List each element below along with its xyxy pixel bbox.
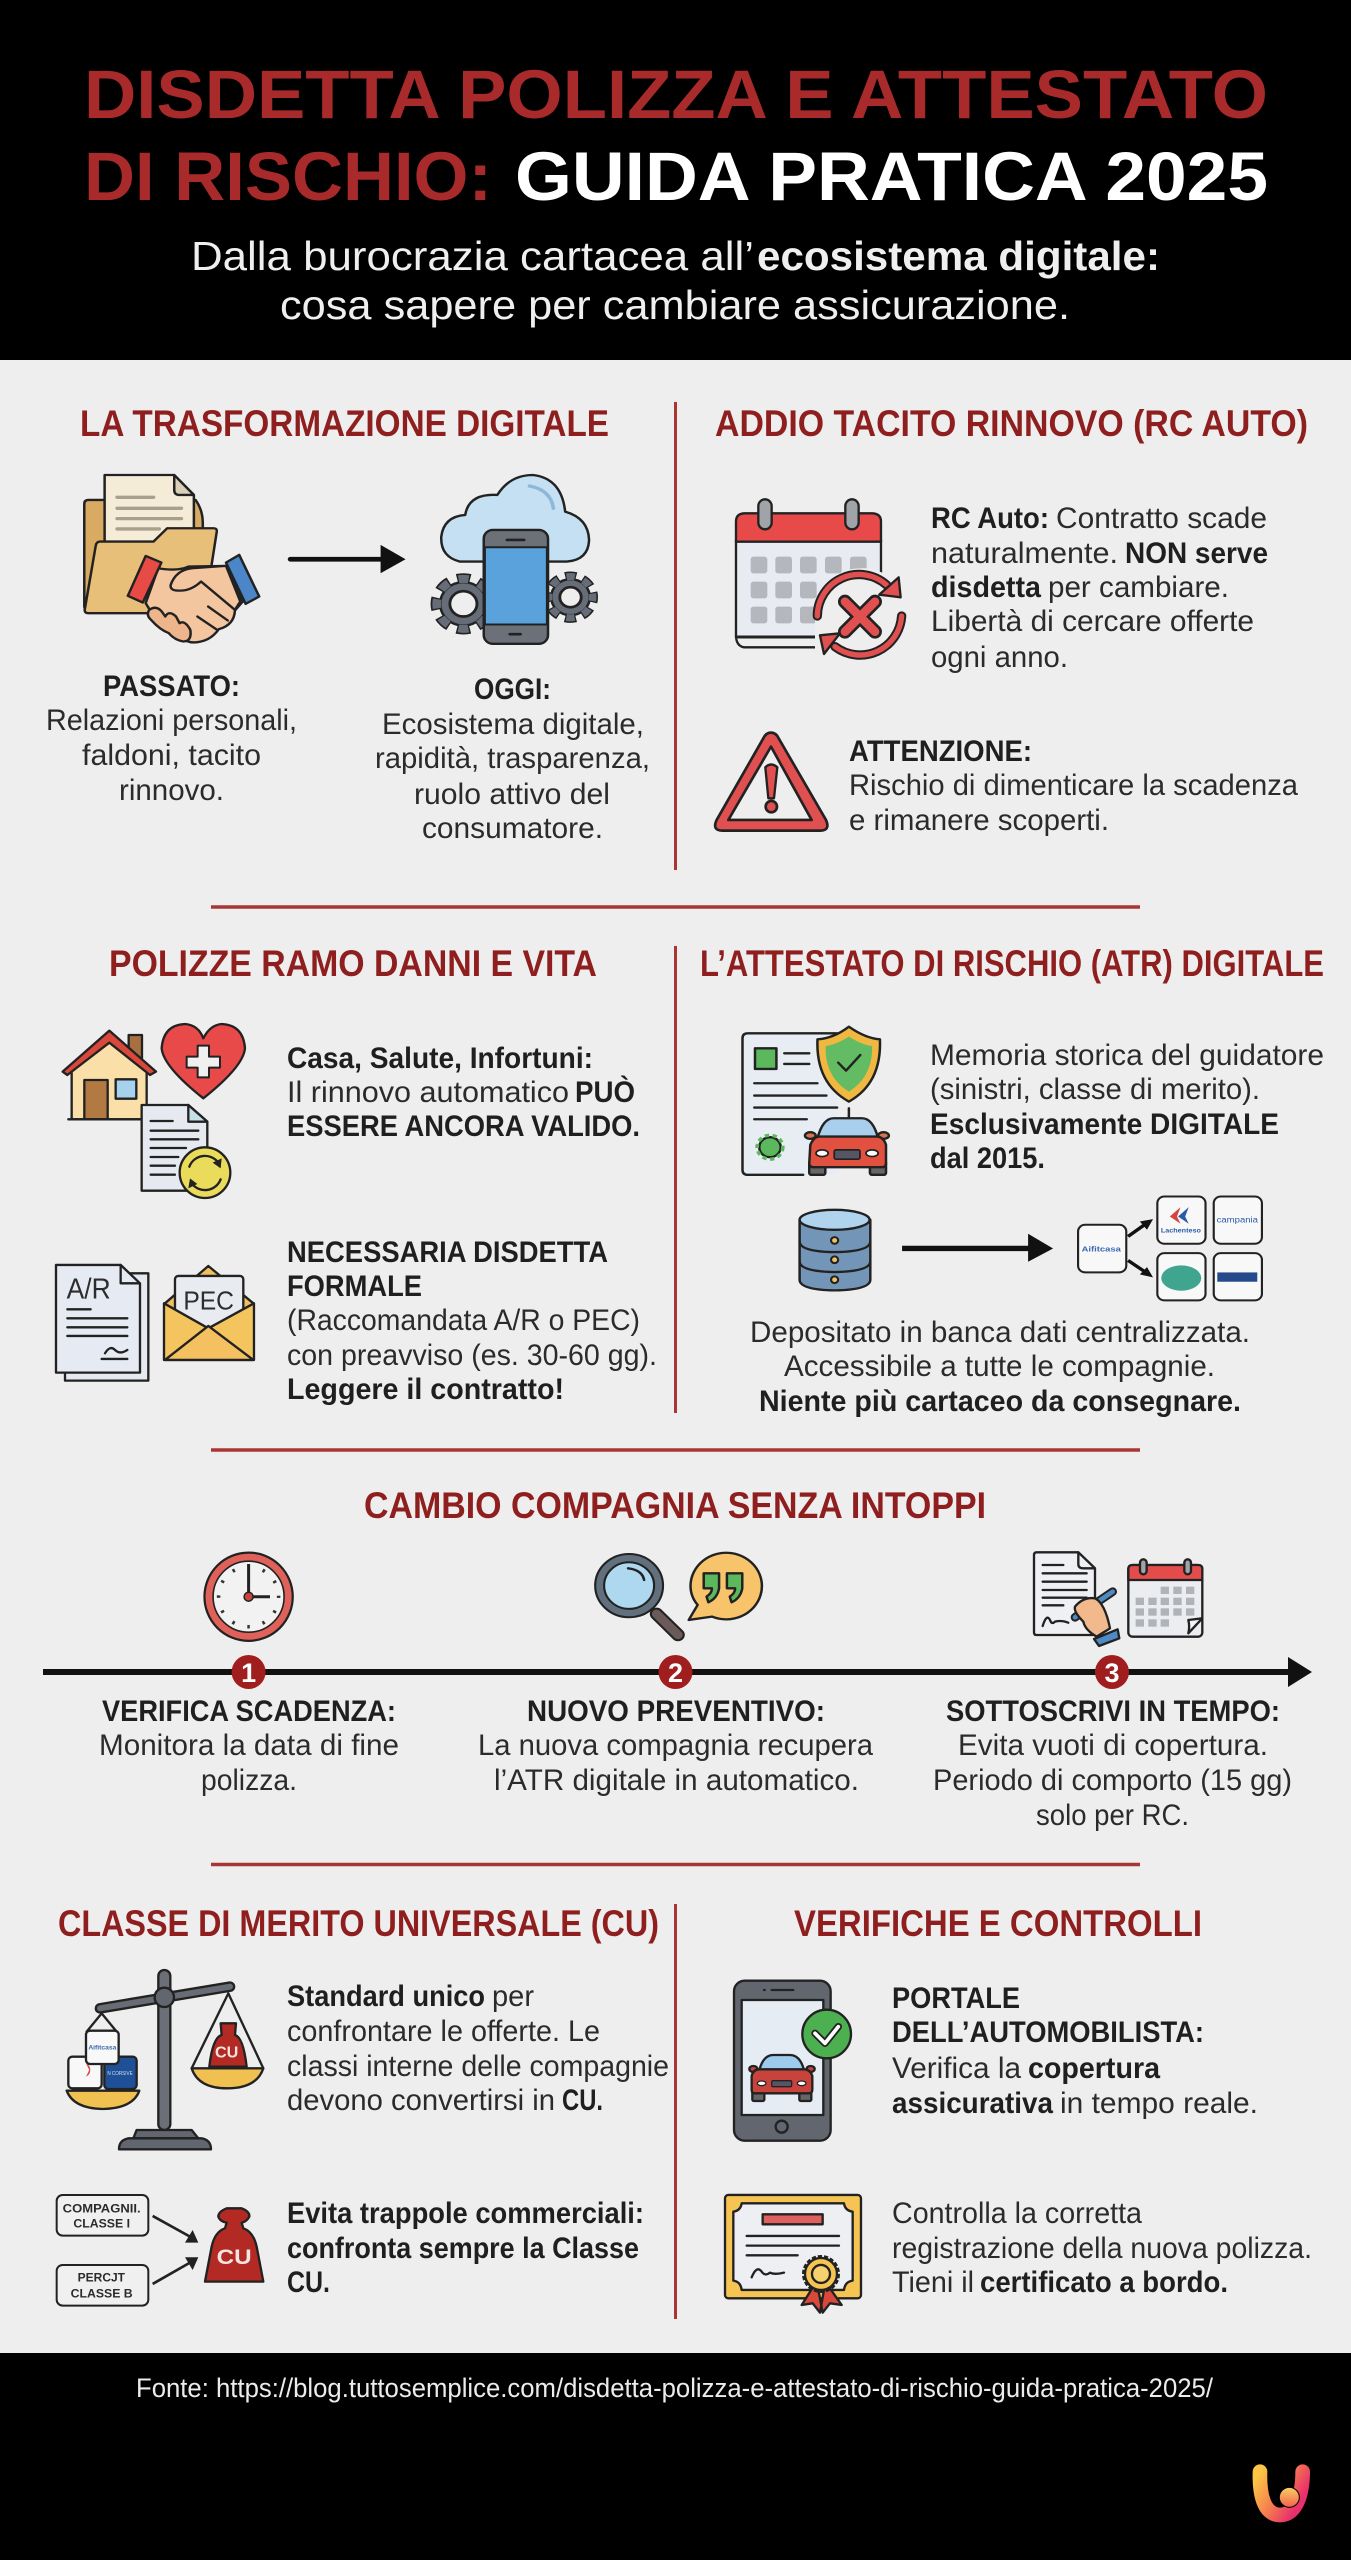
text: rc auto: naturalmente. bbox=[931, 537, 1118, 570]
text: rc auto: RC Auto: bbox=[931, 502, 1049, 535]
subtitle: Dalla burocrazia cartacea all’ bbox=[191, 233, 754, 279]
text: rc auto: ogni anno. bbox=[931, 641, 1068, 674]
text: banca dati: Depositato in banca dati centralizzata. bbox=[750, 1316, 1250, 1349]
text: portale dell'automobilista: assicurativa bbox=[892, 2087, 1053, 2120]
text: step 1: VERIFICA SCADENZA: bbox=[102, 1695, 396, 1728]
title bbox=[84, 56, 1268, 215]
panel: addio tacito rinnovo bbox=[715, 403, 1308, 837]
text: oggi: Ecosistema digitale, bbox=[382, 708, 644, 741]
text: controlla registrazione: Tieni il bbox=[892, 2266, 974, 2299]
panel: attestato di rischio digitale bbox=[700, 943, 1324, 1418]
text: rc auto: per cambiare. bbox=[1048, 571, 1229, 604]
text: memoria storica: Esclusivamente DIGITALE bbox=[930, 1108, 1279, 1141]
text: step 3: solo per RC. bbox=[1036, 1799, 1189, 1832]
icon: classes converging on cu weight: CLASSE B bbox=[71, 2286, 133, 2300]
text: oggi: ruolo attivo del bbox=[414, 778, 610, 811]
text: portale dell'automobilista: DELL’AUTOMOBILISTA: bbox=[892, 2016, 1204, 2049]
step marker 1: 1 bbox=[241, 1658, 256, 1688]
text: rc auto: Contratto scade bbox=[1056, 502, 1267, 535]
footer band bbox=[0, 2353, 1351, 2560]
icon: registered letter and pec envelope bbox=[56, 1265, 254, 1381]
heading: LA TRASFORMAZIONE DIGITALE bbox=[80, 403, 609, 444]
title: DI RISCHIO: bbox=[84, 138, 492, 215]
text: step 3: Periodo di comporto (15 gg) bbox=[933, 1764, 1292, 1797]
panel: classe di merito universale bbox=[57, 1903, 669, 2306]
text: banca dati: Niente più cartaceo da consegnare. bbox=[759, 1385, 1241, 1418]
step marker 2: 2 bbox=[668, 1658, 683, 1688]
title: DISDETTA POLIZZA E ATTESTATO bbox=[84, 56, 1268, 133]
arrow: past to today bbox=[290, 545, 406, 573]
icon: clock bbox=[205, 1553, 293, 1641]
icon: classes converging on cu weight: CLASSE I bbox=[73, 2217, 130, 2231]
text: casa salute infortuni: ESSERE ANCORA VALIDO. bbox=[287, 1110, 640, 1143]
text: portale dell'automobilista: copertura bbox=[1028, 2052, 1160, 2085]
subtitle bbox=[191, 233, 1160, 328]
icon: magnifier and quote bubble bbox=[595, 1553, 762, 1635]
text: rc auto bbox=[931, 502, 1268, 674]
icon: balance scale: CU bbox=[215, 2044, 238, 2061]
step marker 3 bbox=[1095, 1655, 1129, 1689]
header band bbox=[0, 0, 1351, 360]
text: controlla registrazione: registrazione della nuova polizza. bbox=[892, 2232, 1312, 2265]
text: necessaria disdetta formale: (Raccomandata A/R o PEC) bbox=[287, 1304, 640, 1337]
text: step 3: Evita vuoti di copertura. bbox=[958, 1729, 1268, 1762]
panel: la trasformazione digitale bbox=[46, 403, 650, 845]
text: step 2 bbox=[478, 1695, 873, 1797]
text: oggi bbox=[375, 673, 650, 845]
timeline arrow bbox=[43, 1657, 1312, 1687]
text: necessaria disdetta formale: NECESSARIA DISDETTA bbox=[287, 1236, 608, 1269]
text: banca dati bbox=[750, 1316, 1250, 1418]
text: memoria storica: dal 2015. bbox=[930, 1142, 1045, 1175]
heading: POLIZZE RAMO DANNI E VITA bbox=[109, 943, 597, 984]
text: rc auto: Libertà di cercare offerte bbox=[931, 605, 1254, 638]
text: evita trappole bbox=[287, 2197, 644, 2299]
text: standard unico: devono convertirsi in bbox=[287, 2084, 555, 2117]
source link text: Fonte: https://blog.tuttosemplice.com/disdetta-polizza-e-attestato-di-rischio-guida-pratica-2025/ bbox=[136, 2373, 1213, 2403]
heading: CAMBIO COMPAGNIA SENZA INTOPPI bbox=[364, 1485, 986, 1526]
text: casa salute infortuni: PUÒ bbox=[575, 1075, 635, 1109]
text: passato bbox=[46, 670, 297, 807]
text: evita trappole: Evita trappole commerciali: bbox=[287, 2197, 644, 2230]
text: evita trappole: CU. bbox=[287, 2266, 330, 2299]
text: step 1 bbox=[99, 1695, 399, 1797]
icon: classes converging on cu weight: PERCJT bbox=[78, 2271, 126, 2285]
text: standard unico: classi interne delle compagnie bbox=[287, 2050, 669, 2083]
icon: calendar with renewal cancelled bbox=[736, 499, 908, 663]
text: standard unico: per bbox=[492, 1980, 534, 2013]
text: memoria storica bbox=[930, 1039, 1324, 1175]
icon: registered letter and pec envelope: A/R bbox=[67, 1273, 111, 1305]
icon: certificate with seal bbox=[725, 2195, 861, 2313]
text: banca dati: Accessibile a tutte le compagnie. bbox=[784, 1350, 1215, 1383]
step marker 2 bbox=[658, 1655, 692, 1689]
text: necessaria disdetta formale: Leggere il contratto! bbox=[287, 1373, 564, 1406]
text: oggi: rapidità, trasparenza, bbox=[375, 742, 650, 775]
text: controlla registrazione bbox=[892, 2197, 1312, 2299]
text: necessaria disdetta formale bbox=[287, 1236, 657, 1406]
text: standard unico: confrontare le offerte. Le bbox=[287, 2015, 600, 2048]
icon: classes converging on cu weight: COMPAGNII. bbox=[63, 2202, 141, 2216]
heading: VERIFICHE E CONTROLLI bbox=[794, 1903, 1202, 1944]
logo bbox=[1260, 2472, 1303, 2515]
icon: signing contract and calendar bbox=[1034, 1552, 1202, 1646]
icon: phone with car and check bbox=[734, 1981, 851, 2141]
heading: CLASSE DI MERITO UNIVERSALE (CU) bbox=[58, 1903, 659, 1944]
text: step 2: l’ATR digitale in automatico. bbox=[494, 1764, 859, 1797]
text: casa salute infortuni bbox=[287, 1042, 640, 1143]
icon: warning triangle bbox=[715, 733, 827, 831]
icon: registered letter and pec envelope: PEC bbox=[183, 1285, 234, 1315]
icon: insurance company logos: campania bbox=[1217, 1216, 1258, 1224]
subtitle: ecosistema digitale: bbox=[757, 233, 1160, 279]
text: portale dell'automobilista: PORTALE bbox=[892, 1982, 1020, 2015]
text: rc auto: disdetta bbox=[931, 571, 1041, 604]
title: GUIDA PRATICA 2025 bbox=[515, 138, 1268, 215]
text: portale dell'automobilista bbox=[892, 1982, 1258, 2120]
step marker 1 bbox=[232, 1655, 266, 1689]
text: necessaria disdetta formale: FORMALE bbox=[287, 1270, 422, 1303]
text: attenzione: Rischio di dimenticare la scadenza bbox=[849, 769, 1298, 802]
icon: balance scale: N CORSIVE bbox=[107, 2071, 133, 2077]
text: attenzione: ATTENZIONE: bbox=[849, 735, 1032, 768]
text: standard unico: CU. bbox=[562, 2084, 603, 2117]
text: passato: rinnovo. bbox=[119, 774, 224, 807]
text: portale dell'automobilista: in tempo reale. bbox=[1060, 2087, 1258, 2120]
step marker 3: 3 bbox=[1104, 1658, 1120, 1688]
icon: cloud, phone and gears bbox=[437, 475, 593, 644]
icon: classes converging on cu weight: CU bbox=[217, 2245, 252, 2269]
text: passato: PASSATO: bbox=[103, 670, 240, 703]
text: portale dell'automobilista: Verifica la bbox=[892, 2052, 1021, 2085]
text: memoria storica: (sinistri, classe di merito). bbox=[930, 1073, 1260, 1106]
icon: insurance company logos: Aifitcasa bbox=[1082, 1245, 1122, 1253]
text: necessaria disdetta formale: con preavviso (es. 30-60 gg). bbox=[287, 1339, 657, 1372]
text: standard unico bbox=[287, 1980, 669, 2117]
subtitle: cosa sapere per cambiare assicurazione. bbox=[280, 282, 1070, 328]
icon: database bbox=[800, 1210, 870, 1290]
text: attenzione: e rimanere scoperti. bbox=[849, 804, 1109, 837]
arrow: database to companies bbox=[902, 1234, 1053, 1262]
text: standard unico: Standard unico bbox=[287, 1980, 485, 2013]
text: passato: faldoni, tacito bbox=[82, 739, 261, 772]
text: step 3 bbox=[933, 1695, 1292, 1832]
heading: ADDIO TACITO RINNOVO (RC AUTO) bbox=[715, 403, 1308, 444]
icon: balance scale: Aifitcasa bbox=[88, 2045, 117, 2051]
icon: insurance company logos: Lachenteso bbox=[1161, 1228, 1201, 1234]
icon: insurance company logos bbox=[1078, 1196, 1262, 1300]
text: passato: Relazioni personali, bbox=[46, 704, 297, 737]
text: casa salute infortuni: Il rinnovo automatico bbox=[287, 1076, 569, 1109]
text: attenzione bbox=[849, 735, 1298, 837]
icon: classes converging on cu weight bbox=[57, 2195, 263, 2306]
text: oggi: consumatore. bbox=[422, 812, 603, 845]
icon: certificate, shield and car bbox=[742, 1027, 889, 1175]
text: step 1: Monitora la data di fine bbox=[99, 1729, 399, 1762]
icon: house, heart and renewal document bbox=[63, 1024, 245, 1198]
text: rc auto: NON serve bbox=[1125, 537, 1268, 570]
text: step 2: NUOVO PREVENTIVO: bbox=[527, 1695, 825, 1728]
text: step 3: SOTTOSCRIVI IN TEMPO: bbox=[946, 1695, 1280, 1728]
icon: folder and handshake bbox=[84, 475, 259, 642]
text: memoria storica: Memoria storica del guidatore bbox=[930, 1039, 1324, 1072]
text: controlla registrazione: certificato a bordo. bbox=[980, 2266, 1228, 2299]
text: step 2: La nuova compagnia recupera bbox=[478, 1729, 873, 1762]
text: casa salute infortuni: Casa, Salute, Infortuni: bbox=[287, 1042, 593, 1075]
text: oggi: OGGI: bbox=[474, 673, 551, 706]
icon: balance scale bbox=[67, 1970, 263, 2149]
text: evita trappole: confronta sempre la Classe bbox=[287, 2232, 639, 2265]
text: step 1: polizza. bbox=[201, 1764, 297, 1797]
panel: verifiche e controlli bbox=[725, 1903, 1312, 2313]
text: controlla registrazione: Controlla la corretta bbox=[892, 2197, 1142, 2230]
panel: polizze ramo danni e vita bbox=[56, 943, 657, 1406]
panel: cambio compagnia senza intoppi bbox=[43, 1485, 1312, 1832]
